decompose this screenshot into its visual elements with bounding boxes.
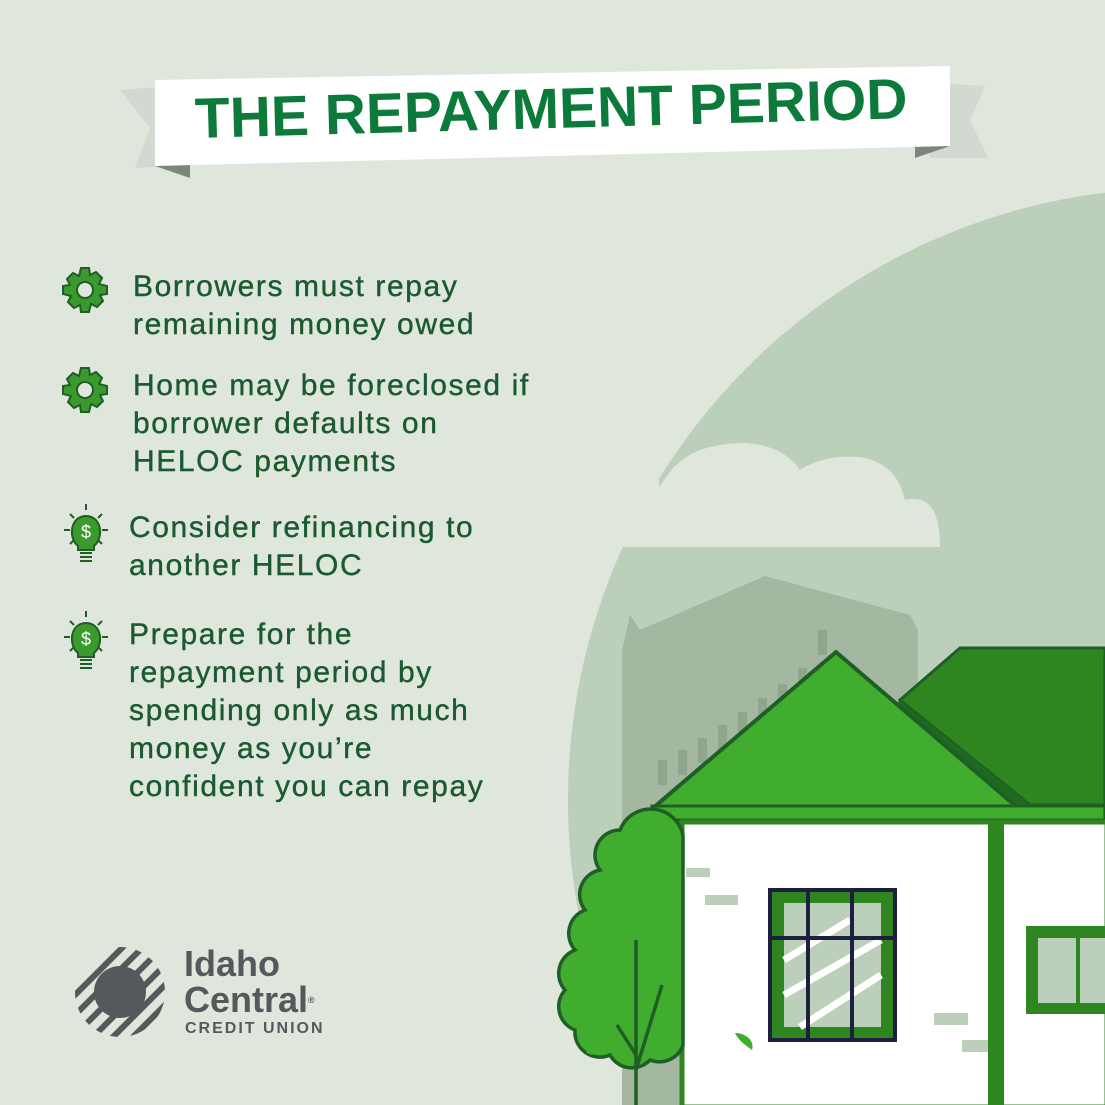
text: item 2: borrower defaults on [133, 407, 438, 440]
tree [559, 809, 753, 1105]
icon: gear 2 [62, 367, 108, 413]
title: THE REPAYMENT PERIOD [194, 67, 908, 151]
text: item 3 [129, 511, 474, 582]
text: item 4: Prepare for the [129, 618, 353, 651]
text: item 4 [129, 618, 484, 803]
icon: gear 1 [62, 267, 108, 313]
icon: logo mark [75, 947, 165, 1037]
text: item 2: HELOC payments [133, 445, 397, 478]
icon: bulb 1 [64, 504, 108, 562]
house: walls [682, 820, 1105, 1105]
logo: CREDIT UNION [185, 1020, 325, 1037]
window right [1026, 926, 1105, 1014]
text: item 2: Home may be foreclosed if [133, 369, 530, 402]
text: item 4: money as you’re [129, 732, 373, 765]
text: item 2 [133, 369, 530, 478]
building silhouette [622, 576, 918, 1105]
text: item 4: spending only as much [129, 694, 469, 727]
icon: bulb 2 [64, 611, 108, 669]
title banner [120, 66, 988, 178]
logo [75, 943, 325, 1037]
window left [770, 890, 895, 1040]
text: item 4: repayment period by [129, 656, 433, 689]
text: item 1: remaining money owed [133, 308, 475, 341]
text: logo name: Central® [184, 979, 315, 1020]
icon: bulb 2: $ [81, 629, 91, 649]
text: item 4: confident you can repay [129, 770, 484, 803]
text: item 1 [133, 270, 475, 341]
icon: bulb 1: $ [81, 522, 91, 542]
house: right roof [895, 648, 1105, 805]
text: item 1: Borrowers must repay [133, 270, 458, 303]
house: main roof [652, 652, 1105, 820]
text: logo name [184, 943, 315, 1020]
text: logo name: Idaho [184, 943, 280, 984]
text: item 3: another HELOC [129, 549, 363, 582]
cloud [560, 380, 940, 547]
text: item 3: Consider refinancing to [129, 511, 474, 544]
